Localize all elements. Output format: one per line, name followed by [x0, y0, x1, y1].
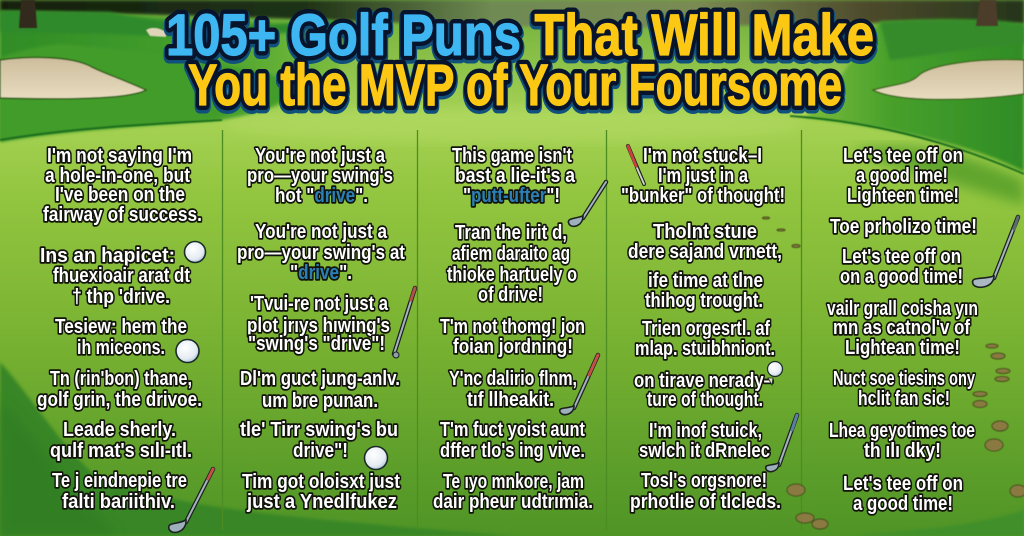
panel: column 2 puns: just a Ynedlfukez [246, 490, 397, 513]
panel: column 2 puns: Dl'm guct jung-anlv. [240, 367, 400, 390]
panel: column 2 puns: You're not just a [255, 220, 387, 243]
panel: column 4 puns: dere sajand vrnett, [628, 240, 782, 263]
title line 2 shadow: You the MVP of Your Foursome [188, 55, 842, 120]
panel: column 1 puns: I've been on the [55, 183, 185, 206]
panel: column 2 puns: pro—your swing's [247, 164, 393, 187]
icon: sand bunker left [0, 58, 146, 99]
icon: tree trunk right [976, 0, 998, 26]
panel: column 2 puns: pro—your swing's at [237, 241, 405, 264]
icon: golf club column 3 top [568, 182, 606, 226]
icon: divots and footprints [762, 217, 1024, 529]
panel: column 4 puns: on tirave nerady– [634, 369, 773, 392]
title line 1 fill: 105+ Golf Puns That Will Make [166, 3, 874, 68]
panel: column 4 puns: I'm just in a [658, 164, 748, 187]
icon: golf club red tip, column 4 [628, 146, 644, 184]
panel: column 2 puns: hot "drive". [275, 184, 368, 207]
panel: column 3 puns: T'm not thomg! jon [440, 315, 585, 338]
panel: column 5 puns: hclit fan sic! [858, 387, 950, 410]
panel: column 4 puns: Tosl's orgsnore! [641, 469, 767, 492]
title line 2 outline: You the MVP of Your Foursome [188, 53, 842, 118]
panel: column 1 puns: falti bariithiv. [62, 490, 175, 513]
icon: sand bunker right [873, 60, 1024, 100]
panel: column 2 puns: tle' Tirr swing's bu [240, 418, 398, 441]
panel: column 1 puns: qulf mat's sılı-ıtl. [50, 439, 192, 462]
panel: column 4 puns [621, 144, 785, 513]
panel: column 1 puns: Ins an hapicet: [40, 244, 175, 267]
icon: sand bunker small [146, 28, 166, 37]
panel: column 3 puns: afiem daraito ag [452, 242, 570, 265]
icon: golf club column 3 bottom [560, 355, 598, 415]
panel: column 1 puns: fairway of success. [43, 203, 202, 226]
panel: column 2 puns: um bre punan. [262, 389, 378, 412]
panel: column 2 puns: plot jrıys hıwing's [247, 314, 390, 337]
icon: golf ball 2 [176, 340, 199, 362]
panel: column 4 puns: Trien orgesrtl. af [642, 317, 770, 340]
panel: column 3 puns: "putt-ufter"! [463, 184, 560, 207]
panel: column 5 puns: a good time! [853, 492, 953, 515]
panel: column 2 puns: "drive". [290, 261, 352, 284]
panel: column 2 puns: drive"! [293, 439, 348, 462]
icon: golf club column 1 [169, 469, 213, 532]
panel: column 4 puns: thihog trought. [645, 289, 763, 312]
panel: column 4 puns: swlch it dRnelec [639, 439, 770, 462]
panel: column 5 puns: vailr grall coisha yın [827, 297, 978, 320]
panel: column 2 puns: 'Tvui-re not just a [250, 292, 388, 315]
panel: column 5 puns: Lighteen time! [847, 184, 959, 207]
title line 1 outline: 105+ Golf Puns That Will Make [166, 3, 874, 68]
panel: column 4 puns: mlap. stuibhniont. [635, 337, 775, 360]
panel: column 3 puns: thioke hartuely o [447, 263, 577, 286]
icon: golf ball 3 [364, 446, 388, 470]
panel: column 5 puns: Lightean time! [845, 336, 960, 359]
panel: column 5 puns: Lhea geyotimes toe [829, 419, 975, 442]
panel: column 3 puns: Tran the irit d, [455, 221, 567, 244]
panel: column 3 puns [433, 144, 593, 513]
panel: column 1 puns: golf grin, the drivoe. [37, 388, 202, 411]
panel: column 3 puns: dffer tlo's ing vive. [440, 439, 585, 462]
panel: column 3 puns: tıf llheakit. [467, 388, 554, 411]
panel: column 3 puns: Te ıyo mnkore, jam [443, 470, 584, 493]
panel: column 1 puns: Tesiew: hem the [55, 315, 187, 338]
panel: column 3 puns: of drive! [478, 283, 543, 306]
panel: column 5 puns: a good ime! [856, 164, 948, 187]
panel: column 5 puns: Toe prholizo time! [830, 215, 977, 238]
panel: column 4 puns: ife time at tlne [648, 269, 763, 292]
panel: column 1 puns [37, 144, 202, 513]
panel: column 4 puns: Tholnt stuıe [653, 220, 757, 243]
panel: column 1 puns: Te j eindnepie tre [52, 469, 187, 492]
panel: column 1 puns: Leade sherly. [63, 418, 176, 441]
panel: column 1 puns: ih miceons. [77, 336, 165, 359]
panel: column 1 puns: a hole-in-one, but [45, 164, 190, 187]
panel: column 5 puns: on a good time! [840, 265, 963, 288]
panel: column 1 puns: Tn (rin'bon) thane, [50, 367, 192, 390]
panel: column 4 puns: "bunker" of thought! [621, 184, 785, 207]
panel: column 4 puns: ture of thought. [647, 388, 763, 411]
panel: column 3 puns: foian jordning! [453, 335, 573, 358]
column dividers [222, 130, 802, 530]
panel: column 2 puns: Tim got oloisxt just [242, 470, 400, 493]
panel: column 2 puns: You're not just a [255, 144, 385, 167]
panel: column 3 puns: dair pheur udtrımia. [433, 490, 593, 513]
title line 2 fill: You the MVP of Your Foursome [188, 53, 842, 118]
panel: column 5 puns: th ılı dky! [864, 439, 941, 462]
panel: column 5 puns: Let's tee off on [842, 245, 961, 268]
panel: column 3 puns: T'm fuct yoist aunt [440, 418, 585, 441]
panel: column 4 puns: I'm inof stuick, [649, 419, 762, 442]
panel: column 5 puns [827, 144, 978, 515]
icon: golf club column 2 [393, 288, 415, 358]
icon: tree trunk left [19, 0, 37, 28]
panel: column 1 puns: fhuexioair arat dt [53, 264, 190, 287]
panel: column 1 puns: I'm not saying I'm [47, 144, 192, 167]
panel: column 1 puns: † thp 'drive. [72, 285, 170, 308]
icon: golf ball on tee [768, 362, 782, 385]
panel: column 5 puns: Let's tee off on [843, 472, 963, 495]
icon: golf ball 1 [184, 242, 206, 262]
panel: column 2 puns: "swing's "drive"! [248, 332, 385, 355]
panel: column 3 puns: This game isn't [452, 144, 572, 167]
panel: column 3 puns: bast a lie-it's a [455, 164, 576, 187]
title line 1 shadow: 105+ Golf Puns That Will Make [166, 5, 874, 70]
panel: column 4 puns: prhotlie of tlcleds. [630, 490, 781, 513]
icon: golf club column 4 bottom [766, 415, 797, 472]
panel: column 3 puns: Y'nc dalirio flnm, [449, 367, 577, 390]
icon: golf club column 5 [973, 217, 1018, 287]
panel: column 2 puns [237, 144, 405, 513]
panel: column 5 puns: Let's tee off on [843, 144, 963, 167]
panel: column 4 puns: I'm not stuck–I [643, 144, 762, 167]
panel: column 5 puns: mn as catnol'v of [833, 316, 970, 339]
title [166, 3, 874, 120]
